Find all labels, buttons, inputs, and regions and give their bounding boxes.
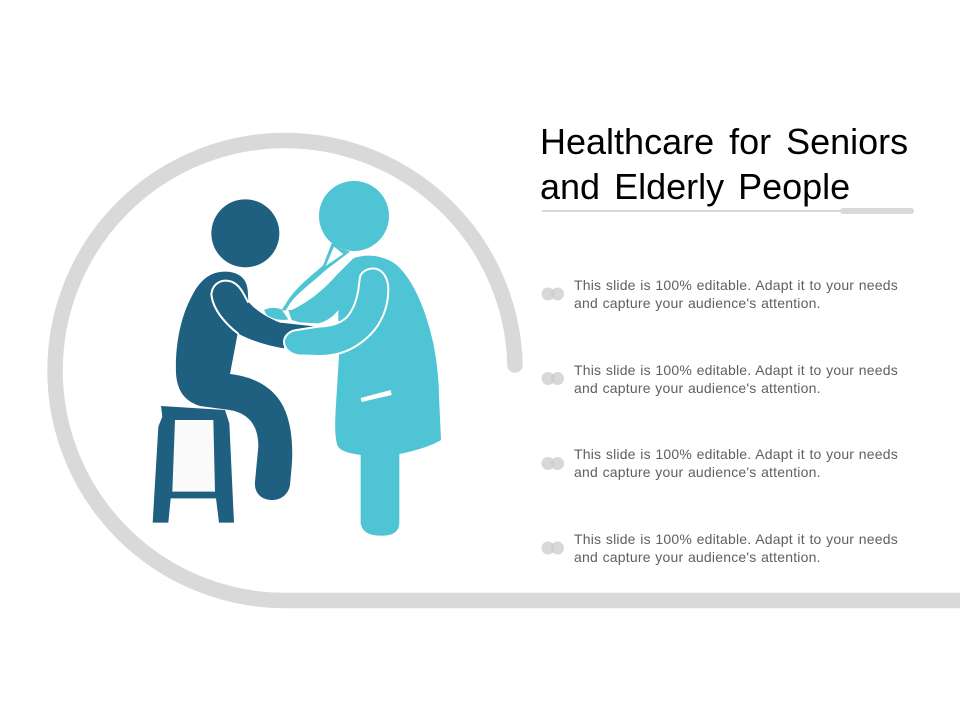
icon: doctor bbox=[284, 181, 441, 536]
list item 4: and capture your audience's attention. bbox=[574, 549, 821, 565]
list item 3 bbox=[542, 446, 898, 480]
list item 1: This slide is 100% editable. Adapt it to your needs bbox=[574, 277, 898, 293]
frame arc: grey rounded outline bbox=[55, 140, 960, 600]
list item 1: and capture your audience's attention. bbox=[574, 295, 821, 311]
title bbox=[540, 121, 908, 207]
list item 2 bbox=[542, 362, 898, 396]
icon: patient bbox=[176, 199, 317, 500]
title underline bbox=[542, 208, 914, 214]
title: Healthcare for Seniors bbox=[540, 121, 908, 162]
list item 3: This slide is 100% editable. Adapt it to your needs bbox=[574, 446, 898, 462]
list item 1 bbox=[542, 277, 898, 311]
icon: stool bbox=[153, 406, 234, 523]
title: and Elderly People bbox=[540, 166, 850, 207]
icon: stethoscope bbox=[264, 243, 350, 320]
illustration: doctor examining seated senior bbox=[153, 181, 441, 536]
list item 3: and capture your audience's attention. bbox=[574, 464, 821, 480]
icon: coat pocket bbox=[361, 390, 392, 402]
list item 2: and capture your audience's attention. bbox=[574, 380, 821, 396]
list item 4: This slide is 100% editable. Adapt it to your needs bbox=[574, 531, 898, 547]
list item 2: This slide is 100% editable. Adapt it to your needs bbox=[574, 362, 898, 378]
list item 4 bbox=[542, 531, 898, 565]
